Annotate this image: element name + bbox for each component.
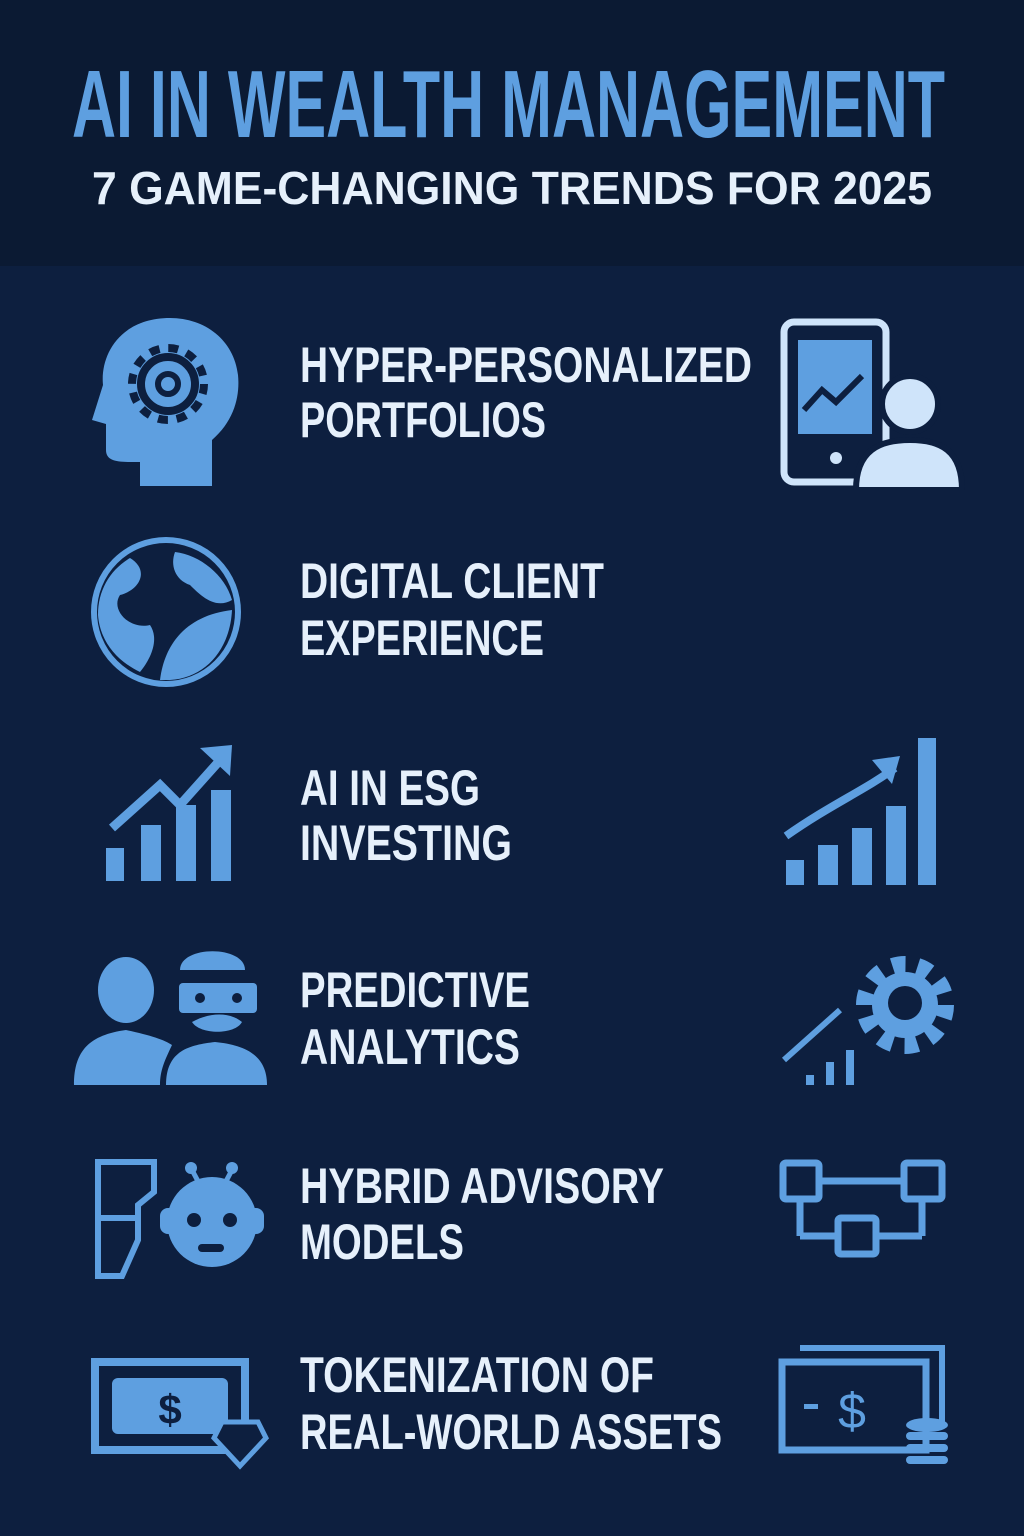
row 5 text	[300, 1158, 664, 1270]
icon: head with gear	[92, 318, 238, 486]
row 2 text: EXPERIENCE	[300, 610, 544, 666]
row 5 text: HYBRID ADVISORY	[300, 1158, 664, 1214]
row 2 text: DIGITAL CLIENT	[300, 553, 604, 609]
icon: bar chart arrow right	[786, 738, 936, 885]
icon: network boxes	[783, 1163, 942, 1254]
icon: banknote with coins: $	[838, 1383, 866, 1439]
row 2 text	[300, 553, 604, 666]
row 6 text: TOKENIZATION OF	[300, 1347, 654, 1403]
icon: banknote with diamond: $	[158, 1386, 182, 1433]
icon: tablet with chart and person	[784, 322, 962, 490]
icon: two people	[74, 951, 267, 1085]
row 4 text: ANALYTICS	[300, 1019, 520, 1075]
row 3 text: INVESTING	[300, 815, 512, 871]
icon: gear with trend	[784, 965, 945, 1085]
icon: banknote with diamond	[95, 1362, 266, 1466]
icon: phone shape and robot	[98, 1162, 264, 1276]
row 4 text: PREDICTIVE	[300, 962, 530, 1018]
row 6 text	[300, 1347, 722, 1460]
row 6 text: REAL-WORLD ASSETS	[300, 1404, 722, 1460]
icon: globe with leaf	[94, 540, 238, 684]
row 3 text: AI IN ESG	[300, 760, 480, 816]
row 1 text: PORTFOLIOS	[300, 392, 546, 448]
row 4 text	[300, 962, 530, 1075]
row 1 text: HYPER-PERSONALIZED	[300, 337, 752, 393]
row 1 text	[300, 337, 752, 448]
row 3 text	[300, 760, 512, 871]
row 5 text: MODELS	[300, 1214, 464, 1270]
subtitle: 7 GAME-CHANGING TRENDS FOR 2025	[92, 162, 932, 214]
icon: banknote with coins	[782, 1348, 948, 1464]
header band	[0, 0, 1024, 266]
icon: bar chart arrow left	[106, 745, 232, 881]
